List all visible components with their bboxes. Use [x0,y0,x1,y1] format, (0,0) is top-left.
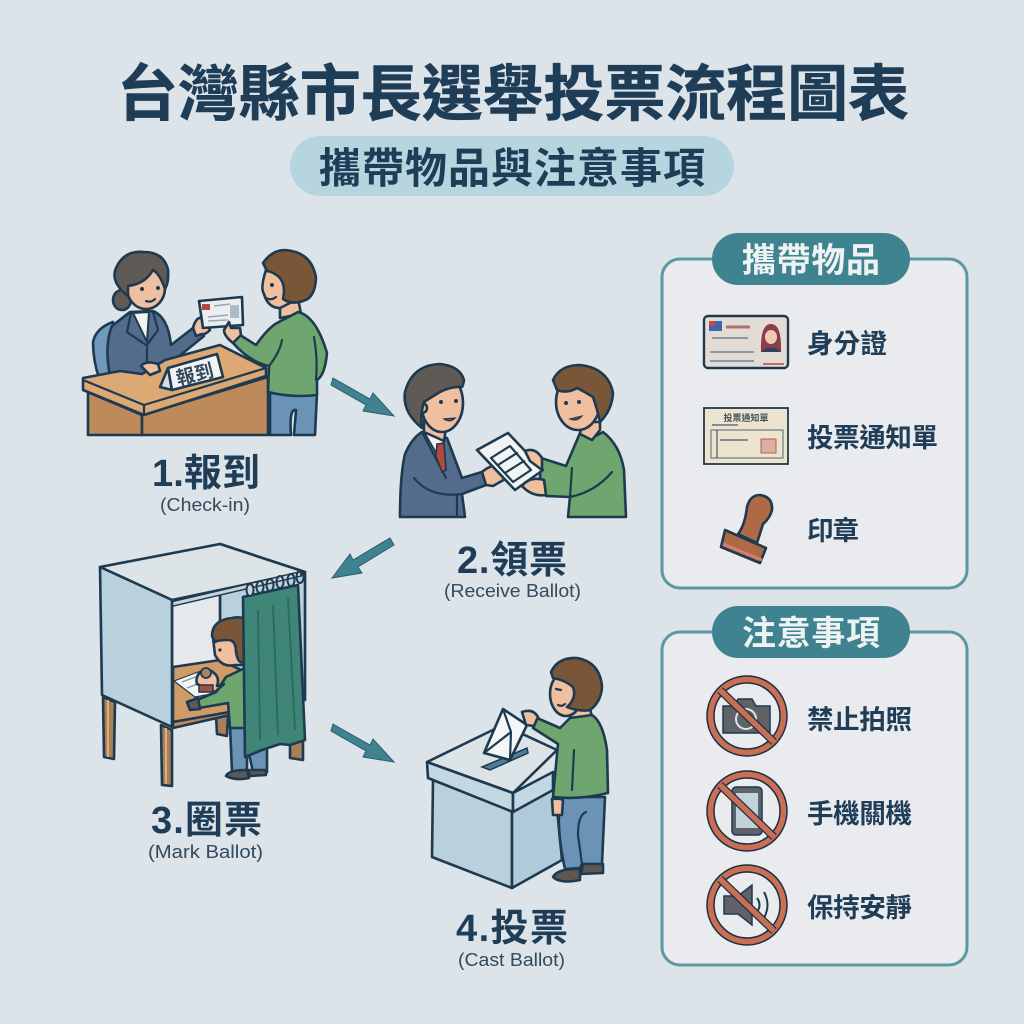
icon: voting notice [704,408,788,464]
voter neck [580,422,600,440]
clerk head [421,374,463,432]
clerk bun [113,290,131,310]
step 3 label: (Mark Ballot) [148,842,263,862]
ballot [477,433,543,490]
step 2 label [444,540,581,601]
voter hands [522,711,538,726]
subtitle pill: 攜帶物品與注意事項 [319,145,705,192]
voter head [550,672,582,716]
icon: no phone [710,774,784,848]
chair [93,322,116,378]
arrow: step 2 to 3 [332,538,394,578]
panel heading pill [712,233,910,285]
voter jeans [270,393,317,435]
clerk hand [482,465,507,486]
step 4 label: (Cast Ballot) [458,950,565,970]
step 3 illustration: voting booth [100,544,305,786]
step 3 label [148,800,263,862]
name plate: 報到 [174,360,216,390]
text: id card: 身分證 [807,329,888,359]
box right side [512,788,562,888]
step 2 label: (Receive Ballot) [444,581,581,601]
voter neck [570,708,592,722]
lid front [427,762,513,812]
name plate [160,354,223,390]
voter torso and arm [197,668,245,728]
voter hair [263,250,316,303]
voter hair [212,617,245,663]
panel heading pill [712,606,910,658]
clerk ear [417,403,427,413]
curtain rings [246,571,304,596]
icon: no sound [710,868,784,942]
panel: items to bring [662,233,967,588]
text: keep quiet: 保持安靜 [807,893,912,923]
clerk head [127,267,165,309]
step 1 label: 1.報到 [152,453,260,495]
step 4 label [456,908,568,970]
clerk hair [114,252,168,296]
step 4 label: 4.投票 [456,908,568,950]
step 4 illustration: ballot box [427,658,608,888]
step 1 label: (Check-in) [160,495,250,515]
voter head [213,638,245,666]
id card in hand [199,297,243,328]
text: phone off: 手機關機 [807,799,912,829]
slot [482,748,528,770]
voter jeans [559,797,605,869]
step 2 label: 2.領票 [457,540,567,582]
panel heading pill: 攜帶物品 [742,242,880,280]
arrow: step 1 to 2 [331,378,394,416]
subtitle pill [290,136,734,196]
clerk jacket [107,311,204,376]
curtain rod [172,574,300,604]
text: voting notice: 投票通知單 [807,423,938,453]
panel heading pill: 注意事項 [742,615,880,653]
voter hand with stamp [187,668,224,710]
voter green sweater [233,312,327,396]
clerk hand on desk [141,362,160,375]
curtain [243,585,305,757]
voter hair [553,365,613,422]
voter hair [551,658,602,711]
voter hands [522,450,546,495]
arrow: step 3 to 4 [331,724,394,762]
left panel [100,567,172,727]
voter sweater [540,432,626,517]
step 1 illustration: check-in [83,250,327,435]
voter hand [224,322,241,343]
voter shoes [226,770,266,779]
red tie [436,443,446,472]
ballot paper on desk [174,672,222,697]
back legs [216,715,228,736]
voter head [556,374,600,430]
text: stamp: 印章 [807,516,859,546]
voter sweater [533,715,608,798]
envelope [484,709,527,760]
clerk hair [405,364,464,428]
booth roof [100,544,305,600]
voter legs [230,725,267,772]
panel: notes [662,606,967,965]
step 3 label: 3.圈票 [151,800,262,842]
icon: id card [704,316,788,368]
box front [432,780,512,888]
icon: voting notice: 投票通知單 [723,412,769,423]
right back panel [220,544,305,700]
clerk hand on card [193,318,210,336]
step 1 label [152,453,260,515]
text: no photos: 禁止拍照 [807,705,912,735]
title: 台灣縣市長選舉投票流程圖表 [117,60,909,128]
voter neck [280,298,301,318]
desk [88,392,142,435]
icon: stamp [721,495,772,563]
icon: no camera [710,680,784,752]
clerk neck [424,420,446,441]
front legs [103,697,115,759]
clerk jacket [400,432,486,517]
voter head [262,270,298,308]
voter shoes [553,864,603,881]
step 2 illustration: receive ballot [400,364,626,517]
lid right [513,772,553,812]
booth interior [172,585,220,672]
lid top [427,725,557,793]
desk surface [173,660,245,722]
